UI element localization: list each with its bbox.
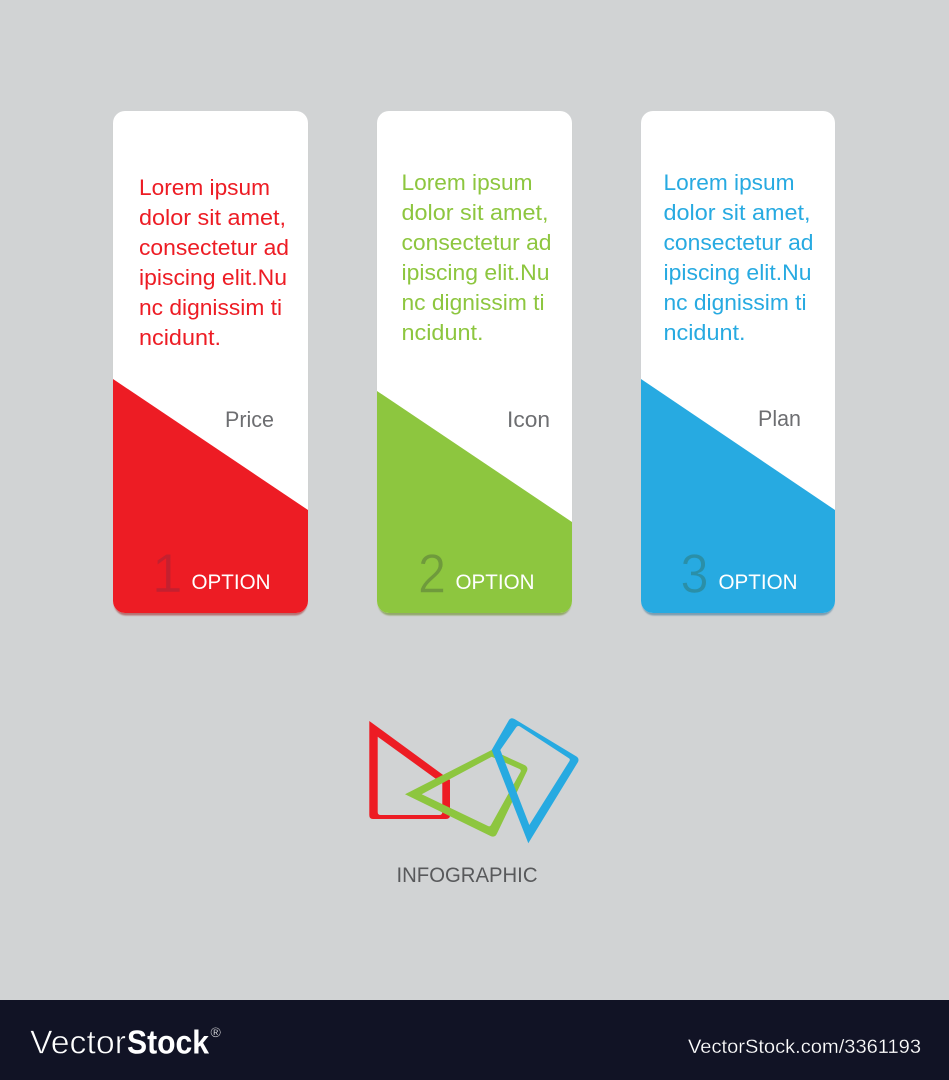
footer bar: [0, 1000, 949, 1080]
label: option: OPTION: [192, 570, 270, 594]
logo caption: INFOGRAPHIC: [396, 863, 538, 887]
body text: option 2: nc dignissim ti: [402, 290, 544, 315]
footer logo: Stock: Stock: [127, 1024, 209, 1062]
footer logo: Vector: Vector: [30, 1024, 126, 1062]
footer image id: VectorStock.com/3361193: [688, 1036, 921, 1058]
panel: option 1 card: [113, 111, 308, 616]
label: Icon: Icon: [507, 407, 550, 432]
number 2: 2: [418, 542, 446, 604]
body text: option 3: ncidunt.: [664, 320, 746, 345]
label: Price: Price: [225, 407, 274, 432]
body text: option 2: Lorem ipsum: [402, 170, 532, 195]
panel: option 3 card: [641, 111, 835, 616]
green diagonal block: [377, 391, 572, 613]
body text: option 3: nc dignissim ti: [664, 290, 806, 315]
body text: option 2: ncidunt.: [402, 320, 484, 345]
icon: green triangle: [405, 750, 527, 837]
body text: option 2: dolor sit amet,: [402, 200, 548, 225]
body text: option 2: [402, 170, 552, 345]
body text: option 3: ipiscing elit.Nu: [664, 260, 812, 285]
body text: option 2: ipiscing elit.Nu: [402, 260, 550, 285]
body text: option 1: [139, 175, 289, 350]
number 1: 1: [152, 542, 183, 604]
label: option: OPTION: [718, 570, 798, 594]
body text: option 3: [664, 170, 814, 345]
body text: option 1: ncidunt.: [139, 325, 221, 350]
body text: option 1: dolor sit amet,: [139, 205, 286, 230]
body text: option 2: consectetur ad: [402, 230, 552, 255]
body text: option 1: ipiscing elit.Nu: [139, 265, 287, 290]
label: Plan: Plan: [758, 406, 801, 431]
panel: option 2 card: [377, 111, 572, 616]
logo mark: three outlined shapes: [369, 718, 578, 843]
number 3: 3: [680, 542, 708, 604]
body text: option 1: nc dignissim ti: [139, 295, 282, 320]
body text: option 1: consectetur ad: [139, 235, 289, 260]
icon: blue kite: [492, 718, 578, 843]
body text: option 3: consectetur ad: [664, 230, 814, 255]
body text: option 3: dolor sit amet,: [664, 200, 810, 225]
blue diagonal block: [641, 379, 835, 613]
label: option: OPTION: [456, 570, 534, 594]
icon: red triangle: [369, 721, 450, 819]
body text: option 3: Lorem ipsum: [664, 170, 794, 195]
registered mark: ®: [210, 1024, 222, 1040]
red diagonal block: [113, 379, 308, 613]
body text: option 1: Lorem ipsum: [139, 175, 270, 200]
